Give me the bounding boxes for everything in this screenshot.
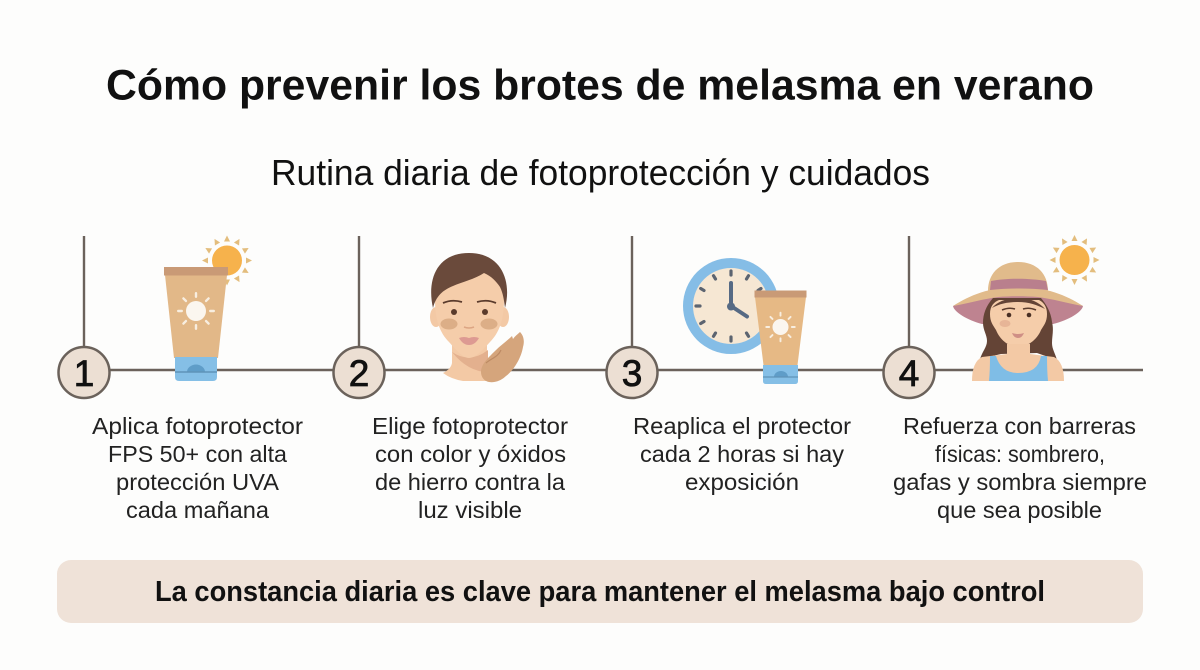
step 2 text: de hierro contra la <box>375 469 565 495</box>
step 3 text: cada 2 horas si hay <box>640 441 845 467</box>
icon: sunscreen tube with sun <box>164 236 252 381</box>
title: Cómo prevenir los brotes de melasma en verano <box>106 62 1094 110</box>
step 4 badge: 4 <box>899 353 919 394</box>
step 1 text: FPS 50+ con alta <box>108 441 287 467</box>
step 1 text <box>92 413 303 523</box>
step 3 text <box>633 413 851 495</box>
step 1 badge <box>58 347 110 398</box>
step 2 text <box>372 413 568 523</box>
step 4 text: que sea posible <box>937 497 1102 523</box>
step 2 badge <box>334 347 384 398</box>
icon: clock and sunscreen tube <box>683 258 806 384</box>
step 4 badge <box>884 347 934 398</box>
step 3 text: Reaplica el protector <box>633 413 851 439</box>
step 1 text: cada mañana <box>126 497 269 523</box>
callout banner: La constancia diaria es clave para mantener el melasma bajo control <box>155 576 1045 608</box>
timeline axis <box>84 236 1143 370</box>
step 1 badge: 1 <box>74 353 94 394</box>
step 2 badge: 2 <box>349 353 369 394</box>
subtitle: Rutina diaria de fotoprotección y cuidados <box>271 152 930 193</box>
step 2 text: Elige fotoprotector <box>372 413 568 439</box>
step 3 badge <box>606 347 658 398</box>
icon: woman with sun hat and sun <box>953 235 1100 381</box>
step 4 text: físicas: sombrero, <box>935 441 1105 467</box>
step 4 text: gafas y sombra siempre <box>893 469 1147 495</box>
step 1 text: Aplica fotoprotector <box>92 413 303 439</box>
icon: face with melasma and applying hand <box>430 253 524 382</box>
step 3 text: exposición <box>685 469 799 495</box>
step 3 badge: 3 <box>622 353 642 394</box>
step 4 text <box>893 413 1147 523</box>
step 2 text: luz visible <box>418 497 522 523</box>
callout banner <box>57 560 1143 623</box>
step 1 text: protección UVA <box>116 469 280 495</box>
step 4 text: Refuerza con barreras <box>903 413 1136 439</box>
step 2 text: con color y óxidos <box>375 441 566 467</box>
